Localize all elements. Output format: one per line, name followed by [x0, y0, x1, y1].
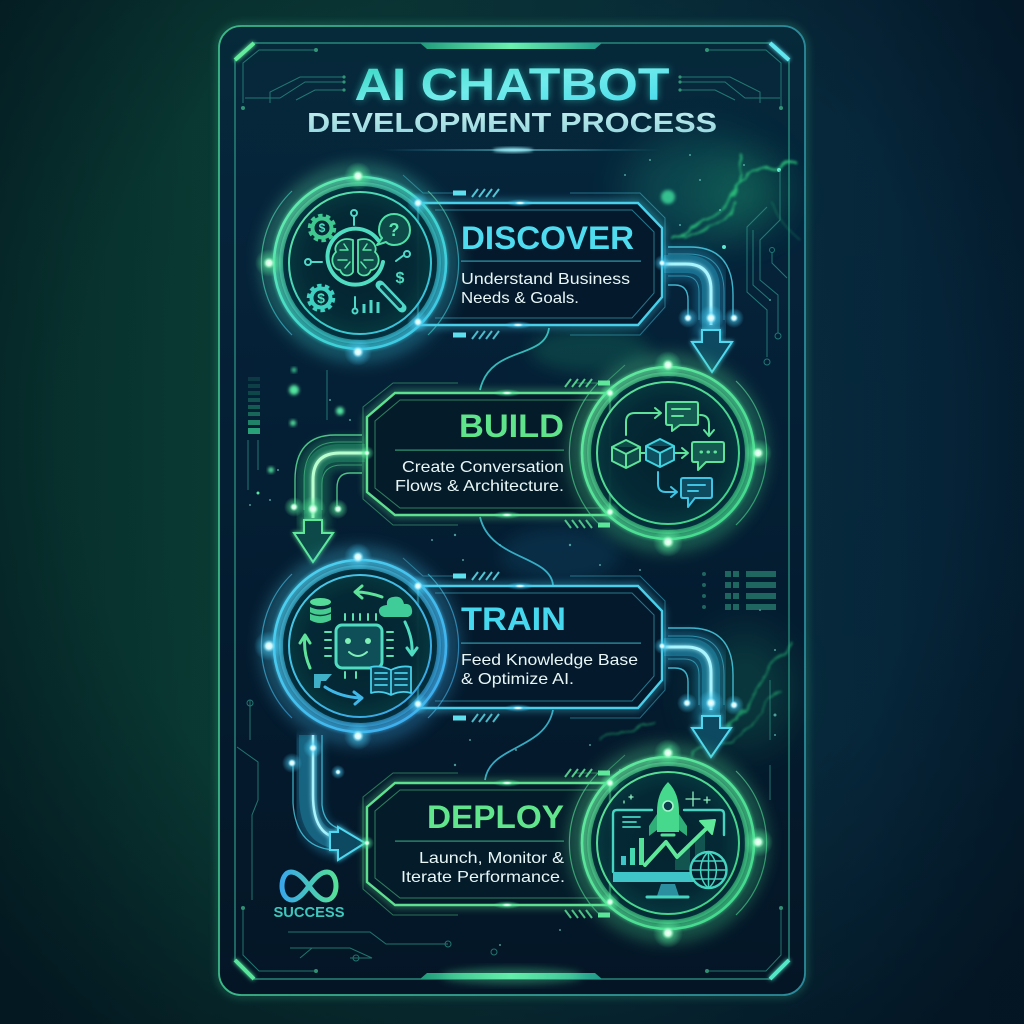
deploy divider: [395, 840, 564, 842]
title: [307, 59, 717, 138]
question mark: ?: [388, 220, 400, 240]
build heading: BUILD: [459, 408, 564, 444]
deploy ring: [569, 753, 767, 933]
discover body: Understand Business: [461, 271, 630, 288]
nebula: upper right: [625, 135, 800, 249]
ribbons between steps: [480, 328, 553, 780]
deploy ring lights: [360, 739, 773, 948]
build panel shape: [363, 365, 625, 525]
build connector stripes: [565, 379, 610, 528]
arrow: train to deploy left: [282, 735, 365, 860]
discover connector stripes: [453, 189, 499, 339]
build body: Create Conversation: [402, 459, 564, 476]
success label: SUCCESS: [274, 904, 344, 921]
panel: main frame: [219, 26, 805, 995]
decoration: left floating dots: [256, 368, 344, 494]
discover ring lights: [255, 162, 670, 366]
dollar marks: $: [317, 290, 325, 306]
icon: brain, magnifier, gears and question: [305, 210, 410, 314]
discover body: Needs & Goals.: [461, 290, 579, 307]
deploy panel shape: [363, 755, 625, 915]
title: AI CHATBOT: [354, 59, 670, 110]
build ring lights: [360, 351, 772, 557]
decoration: right data table: [702, 571, 776, 610]
circuit traces: frame: [237, 48, 787, 973]
train divider: [461, 642, 641, 644]
title: AI CHATBOT: [354, 59, 670, 110]
step 1: discover: [255, 162, 670, 366]
train panel shape: [403, 558, 665, 718]
build divider: [395, 450, 564, 451]
discover divider: [461, 260, 641, 262]
title divider: [382, 148, 660, 152]
step 3: train: [254, 543, 670, 750]
arrow: build to train: [284, 435, 367, 562]
icon: rocket on monitor: [613, 782, 726, 897]
deploy body: Iterate Performance.: [401, 869, 565, 886]
deploy connector stripes: [565, 769, 610, 918]
nebula: lower right: [600, 630, 795, 790]
build ring: [569, 363, 767, 543]
train body: & Optimize AI.: [461, 671, 574, 688]
train heading: TRAIN: [461, 601, 566, 637]
step 2: build: [360, 351, 772, 557]
dollar marks: $: [319, 221, 326, 235]
train connector stripes: [453, 572, 499, 722]
deploy heading: DEPLOY: [427, 799, 564, 835]
success badge: [274, 872, 344, 921]
train body: Feed Knowledge Base: [461, 652, 638, 669]
arrow: train to deploy right: [662, 628, 744, 757]
train ring: [261, 556, 459, 736]
deploy body: Launch, Monitor &: [419, 850, 564, 867]
nebula: middle: [500, 328, 650, 583]
build body: Flows & Architecture.: [395, 478, 564, 495]
discover heading: DISCOVER: [461, 220, 634, 256]
title: DEVELOPMENT PROCESS: [307, 107, 717, 138]
step 4: deploy: [360, 739, 773, 948]
discover ring: [261, 173, 459, 353]
dollar marks: $: [396, 270, 405, 287]
dollar marks: [317, 221, 405, 306]
icon: training loop: [300, 586, 417, 704]
icon: conversation flow: [612, 402, 724, 507]
star field: [249, 154, 776, 946]
decoration: left signal bars: [248, 377, 260, 434]
train ring lights: [254, 543, 670, 750]
arrow: discover to build: [662, 247, 744, 372]
discover panel shape: [403, 175, 665, 335]
icon: infinity: [282, 872, 336, 900]
